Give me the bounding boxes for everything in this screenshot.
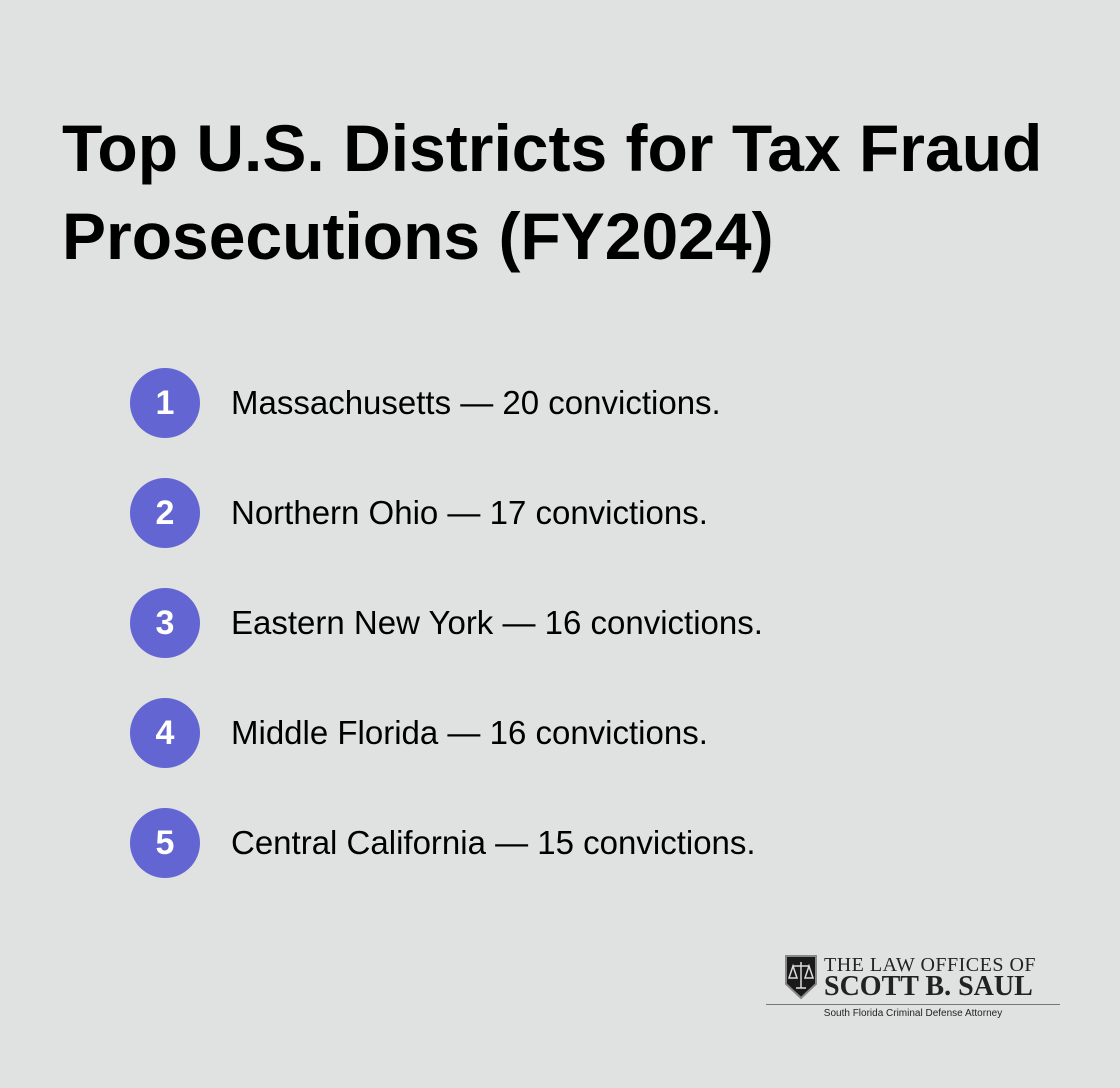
logo: SCOTT B. SAUL: [824, 971, 1033, 1002]
item 5: [130, 808, 756, 878]
item 2: [130, 478, 708, 548]
logo: [766, 954, 1060, 1019]
logo text: THE LAW OFFICES OF: [824, 954, 1036, 976]
item 3: [130, 588, 763, 658]
item 3: 3: [156, 604, 174, 642]
item 5: Central California — 15 convictions.: [231, 824, 756, 861]
item 2: Northern Ohio — 17 convictions.: [231, 494, 708, 531]
item 1: [130, 368, 721, 438]
logo: South Florida Criminal Defense Attorney: [824, 1008, 1002, 1019]
item 4: Middle Florida — 16 convictions.: [231, 714, 708, 751]
item 4: [130, 698, 708, 768]
icon: shield with scales: [785, 955, 817, 1000]
item 4: 4: [156, 714, 174, 752]
item 1: Massachusetts — 20 convictions.: [231, 384, 721, 421]
item 1: 1: [156, 384, 174, 422]
item 5: 5: [156, 824, 174, 862]
item 3: Eastern New York — 16 convictions.: [231, 604, 763, 641]
item 2: 2: [156, 494, 174, 532]
title: Top U.S. Districts for Tax Fraud Prosecutions (FY2024): [62, 111, 1042, 273]
